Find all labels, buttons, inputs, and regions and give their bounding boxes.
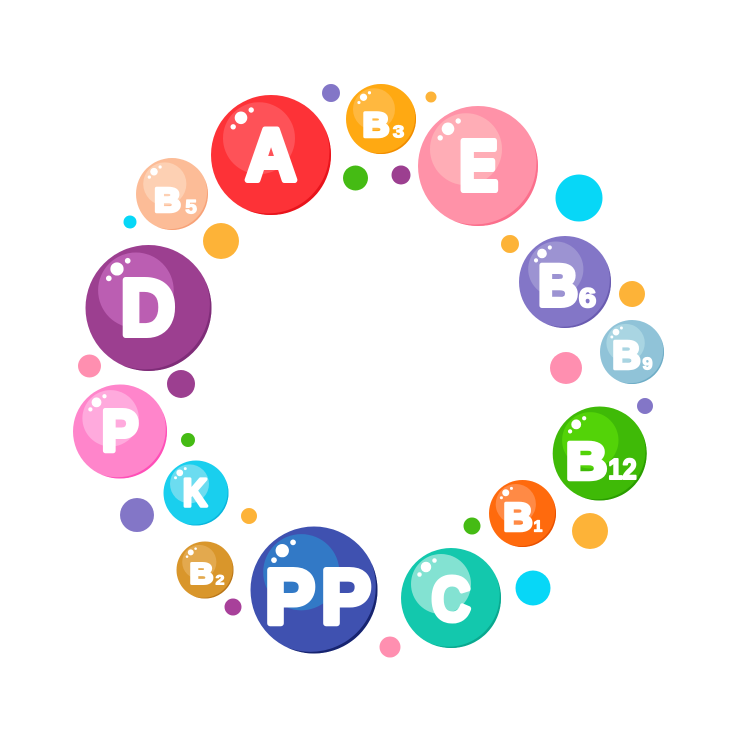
dot: cyan right — [556, 174, 602, 222]
label B12 — [566, 432, 637, 490]
label B12: 12 — [608, 452, 637, 485]
label B5: 5 — [185, 197, 197, 218]
vitamin K bubble — [164, 460, 228, 526]
dot: purple bottom — [224, 598, 242, 616]
label B2: B — [190, 557, 213, 590]
vitamin D bubble — [86, 245, 212, 371]
letter D: D — [121, 262, 175, 352]
dot: orange near K — [241, 508, 257, 524]
dot: orange upper left — [203, 223, 239, 259]
letters PP — [265, 554, 371, 640]
label B3: B — [363, 107, 389, 144]
dot: pink bottom — [380, 636, 400, 658]
vitamin B5 bubble — [136, 158, 208, 230]
label B2: 2 — [216, 572, 224, 588]
letter C: C — [432, 565, 470, 634]
dot: cyan upper left — [124, 216, 136, 228]
dot: violet lower left — [120, 498, 154, 532]
vitamin E bubble — [418, 106, 538, 226]
letters PP: P — [265, 554, 315, 640]
label B5: B — [154, 183, 181, 219]
vitamin B1 bubble — [489, 480, 556, 547]
label B6 — [538, 253, 596, 318]
letter E: E — [459, 125, 498, 205]
small decorative dots — [78, 84, 653, 658]
dot: violet top — [322, 84, 340, 102]
label B2 — [190, 557, 224, 590]
dot: purple top — [392, 166, 410, 184]
dot: green left — [181, 433, 195, 447]
letter P: P — [102, 398, 138, 463]
vitamin PP bubble — [250, 526, 378, 654]
dot: orange near B6 — [501, 235, 519, 253]
vitamin B2 bubble — [176, 542, 234, 598]
letters PP: P — [321, 554, 371, 640]
vitamin B3 bubble — [346, 84, 416, 154]
dot: small orange top — [426, 92, 436, 102]
letter A: A — [246, 115, 296, 196]
label B3: 3 — [393, 122, 404, 142]
vitamin C bubble — [401, 548, 501, 648]
label B12: B — [566, 432, 607, 490]
vitamin B6 bubble — [519, 236, 611, 328]
dot: violet right — [637, 398, 653, 414]
vitamin A bubble — [211, 95, 331, 215]
dot: green top — [343, 166, 368, 190]
vitamin P bubble — [73, 384, 167, 478]
dot: green lower right — [464, 518, 480, 534]
dot: orange lower right — [572, 513, 608, 549]
vitamin B12 bubble — [553, 406, 647, 500]
label B3 — [363, 107, 404, 144]
label B5 — [154, 183, 197, 219]
label B6: 6 — [579, 284, 596, 313]
dot: pink right — [550, 352, 582, 384]
dot: cyan bottom right — [516, 570, 550, 606]
label B1: 1 — [534, 518, 543, 536]
dot: purple left — [167, 370, 195, 398]
label B6: B — [538, 253, 578, 318]
letter K: K — [183, 471, 207, 515]
label B9: 9 — [642, 354, 653, 373]
label B9: B — [612, 334, 641, 378]
label B1: B — [503, 496, 533, 539]
vitamin B9 bubble — [600, 320, 664, 384]
dot: pink left — [78, 354, 101, 378]
dot: orange right — [619, 281, 645, 307]
